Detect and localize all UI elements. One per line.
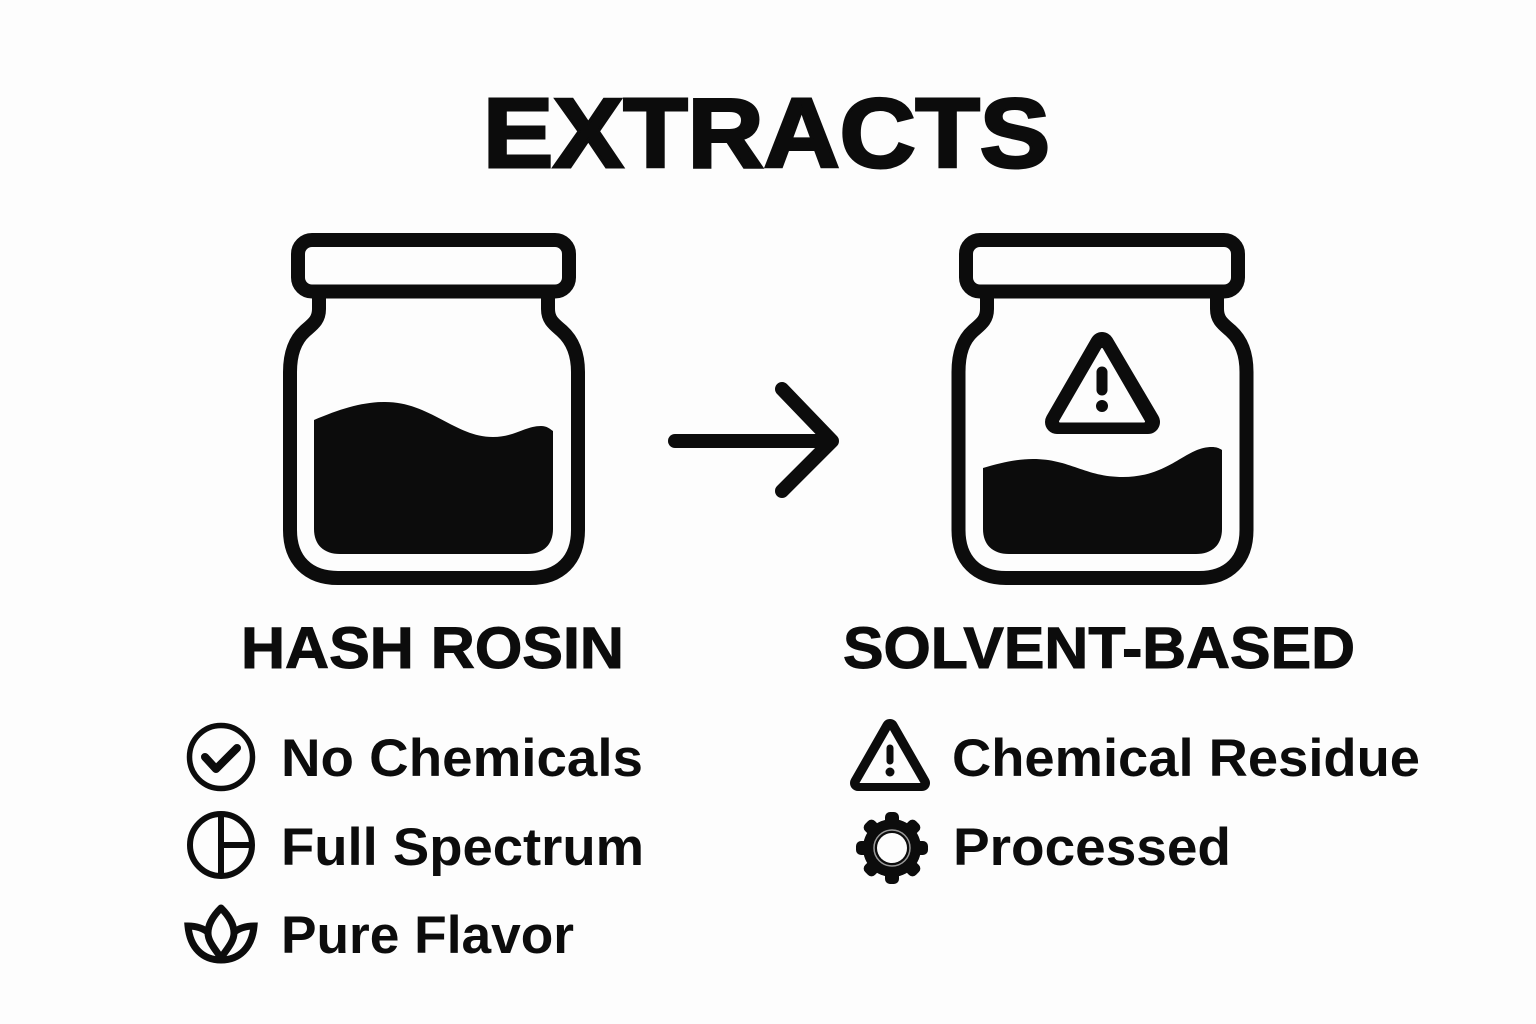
- text: no chemicals: No Chemicals: [281, 729, 643, 788]
- text: pure flavor: Pure Flavor: [281, 906, 574, 965]
- jar contents: [983, 447, 1222, 554]
- jar lid: [966, 240, 1238, 292]
- jar body: [958, 298, 1246, 578]
- arrow: [675, 389, 832, 491]
- heading: solvent-based: SOLVENT-BASED: [843, 616, 1355, 681]
- text: processed: Processed: [953, 818, 1231, 877]
- jar lid: [298, 240, 569, 292]
- icon: hash rosin jar: [290, 240, 578, 578]
- icon: gear: [856, 812, 928, 884]
- icon: warning triangle: [858, 727, 922, 783]
- icon: solvent-based jar: [958, 240, 1246, 578]
- list: solvent-based drawbacks: [856, 727, 1420, 884]
- jar body: [290, 298, 578, 578]
- icon: check circle: [190, 726, 252, 788]
- icon: lotus leaves: [188, 908, 254, 960]
- title: EXTRACTS: [483, 78, 1050, 188]
- text: full spectrum: Full Spectrum: [281, 818, 644, 877]
- icon: divided circle: [190, 814, 252, 876]
- heading: hash rosin: HASH ROSIN: [241, 616, 624, 681]
- text: chemical residue: Chemical Residue: [952, 729, 1420, 788]
- warning symbol in jar: [1057, 344, 1148, 422]
- list: hash rosin benefits: [188, 726, 644, 965]
- jar contents: [314, 402, 553, 554]
